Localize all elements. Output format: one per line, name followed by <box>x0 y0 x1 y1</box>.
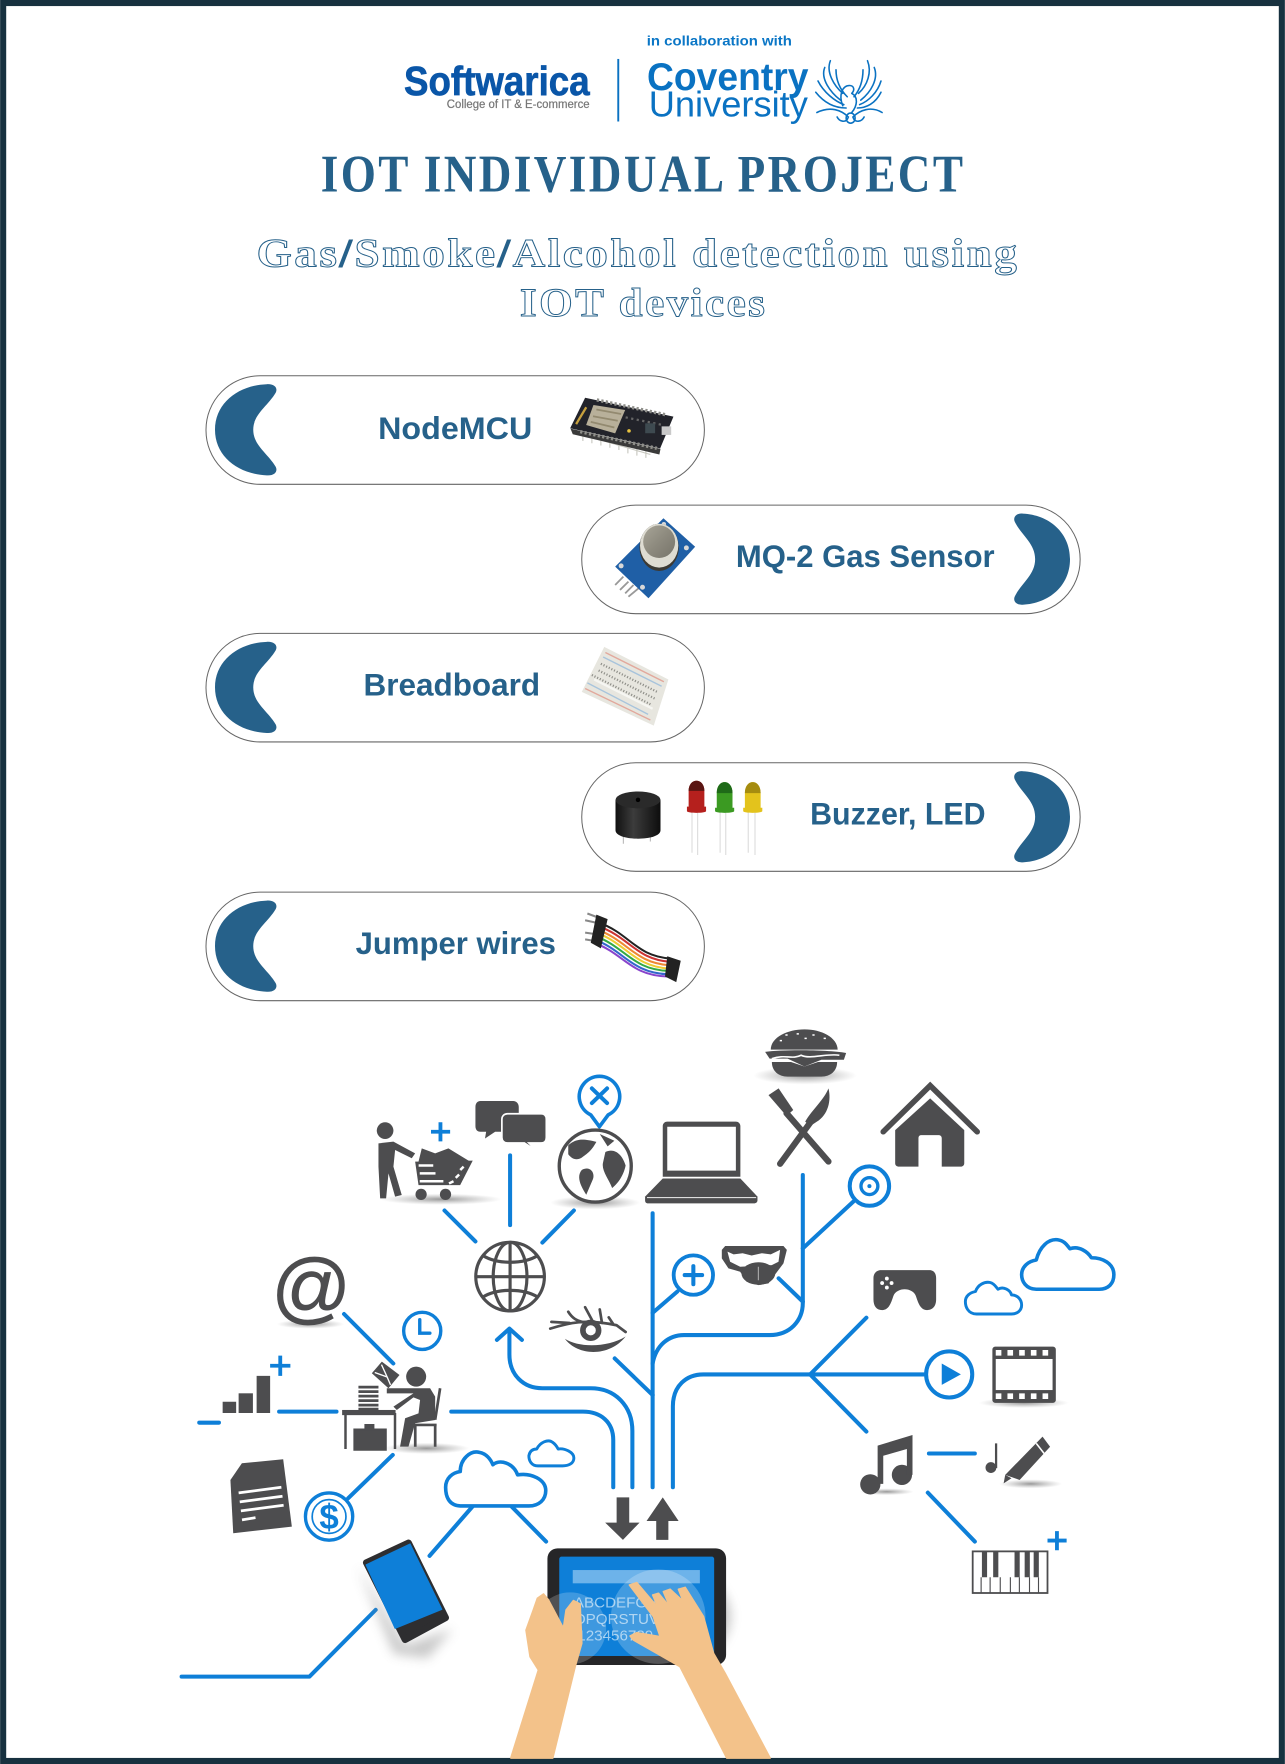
icon: person at desk <box>342 1362 469 1454</box>
crescent <box>1014 771 1070 862</box>
icon: shopping cart <box>377 1122 502 1205</box>
subtitle: Gas/Smoke /Alcohol detection using <box>257 231 1019 276</box>
icon: phone <box>358 1543 452 1658</box>
logo: Coventry University: University <box>649 84 808 125</box>
icon: at sign: @ <box>271 1243 351 1331</box>
icon: dollar coin <box>305 1493 353 1540</box>
icon: tablet with hands <box>511 1548 770 1758</box>
icon: web globe <box>476 1242 545 1311</box>
logo divider <box>617 59 619 122</box>
panel: MQ-2 Gas Sensor <box>582 505 1080 614</box>
logos header <box>404 33 882 125</box>
icon: small cloud <box>529 1441 574 1466</box>
icon: plus circle <box>674 1255 713 1295</box>
icon: MQ-2 sensor <box>615 518 695 598</box>
panel: Jumper wires <box>206 892 704 1001</box>
left hand <box>511 1594 582 1758</box>
icon: gamepad <box>873 1270 936 1310</box>
crescent <box>215 384 276 475</box>
icon: clock <box>404 1312 441 1349</box>
icon: note and pencil <box>986 1437 1062 1488</box>
icon: NodeMCU board <box>570 398 673 458</box>
icon: breadboard <box>582 647 668 726</box>
icon: LEDs <box>687 781 762 855</box>
logo: Softwarica: Softwarica <box>404 58 590 104</box>
logo: phoenix crest <box>816 61 882 123</box>
icon: dollar coin: $ <box>319 1498 339 1537</box>
label: Breadboard: Breadboard <box>364 666 540 702</box>
tablet keyboard text: 123456789 <box>577 1627 653 1644</box>
tablet keyboard text: ABCDEFGH <box>574 1594 658 1611</box>
diagram: internet of things tree <box>182 1029 1114 1758</box>
crescent <box>1014 514 1070 605</box>
icon: target <box>850 1166 889 1206</box>
icon: signal bars <box>223 1356 290 1413</box>
icon: world globe <box>550 1130 640 1209</box>
icon: clouds <box>965 1240 1114 1314</box>
subtitle: IOT devices <box>520 280 767 325</box>
icon: film strip <box>979 1347 1069 1408</box>
icon: jumper wires <box>585 914 681 982</box>
right hand <box>629 1583 770 1758</box>
panel: Buzzer, LED <box>582 763 1080 871</box>
connector lines <box>182 1155 975 1677</box>
label: Buzzer, LED: Buzzer, LED <box>810 796 986 832</box>
logo: Coventry University <box>647 55 809 125</box>
icon: document <box>230 1459 292 1533</box>
icon: download and upload arrows <box>605 1497 679 1540</box>
icon: fork and knife <box>768 1088 830 1164</box>
icon: buzzer <box>616 791 660 844</box>
panel: NodeMCU <box>206 376 704 484</box>
title: IOT INDIVIDUAL PROJECT <box>321 146 965 204</box>
icon: chat bubbles <box>475 1101 546 1151</box>
icon: eye <box>550 1307 626 1352</box>
text: in collaboration with: in collaboration with <box>647 33 792 49</box>
label: MQ-2 Gas Sensor: MQ-2 Gas Sensor <box>736 538 995 574</box>
tablet keyboard text <box>574 1594 660 1644</box>
icon: burger <box>753 1029 857 1084</box>
icon: mouth and tongue <box>722 1246 787 1285</box>
icon: location pin with cross <box>579 1076 620 1127</box>
tablet keyboard text: OPQRSTUV <box>574 1611 660 1628</box>
icon: large cloud <box>446 1452 546 1506</box>
icon: laptop <box>645 1122 757 1203</box>
logo: Softwarica: College of IT & E-commerce <box>447 97 590 111</box>
panel: Breadboard <box>206 633 704 742</box>
crescent <box>215 901 276 992</box>
icon: play button <box>926 1351 972 1397</box>
icon: music notes <box>860 1435 914 1495</box>
logo: Coventry University: Coventry <box>647 55 809 99</box>
icon: house <box>883 1086 977 1167</box>
crescent <box>215 642 276 733</box>
label: Jumper wires: Jumper wires <box>356 925 556 961</box>
subtitle <box>257 231 1019 325</box>
icon: piano keys <box>973 1531 1067 1593</box>
label: NodeMCU: NodeMCU <box>378 410 532 446</box>
